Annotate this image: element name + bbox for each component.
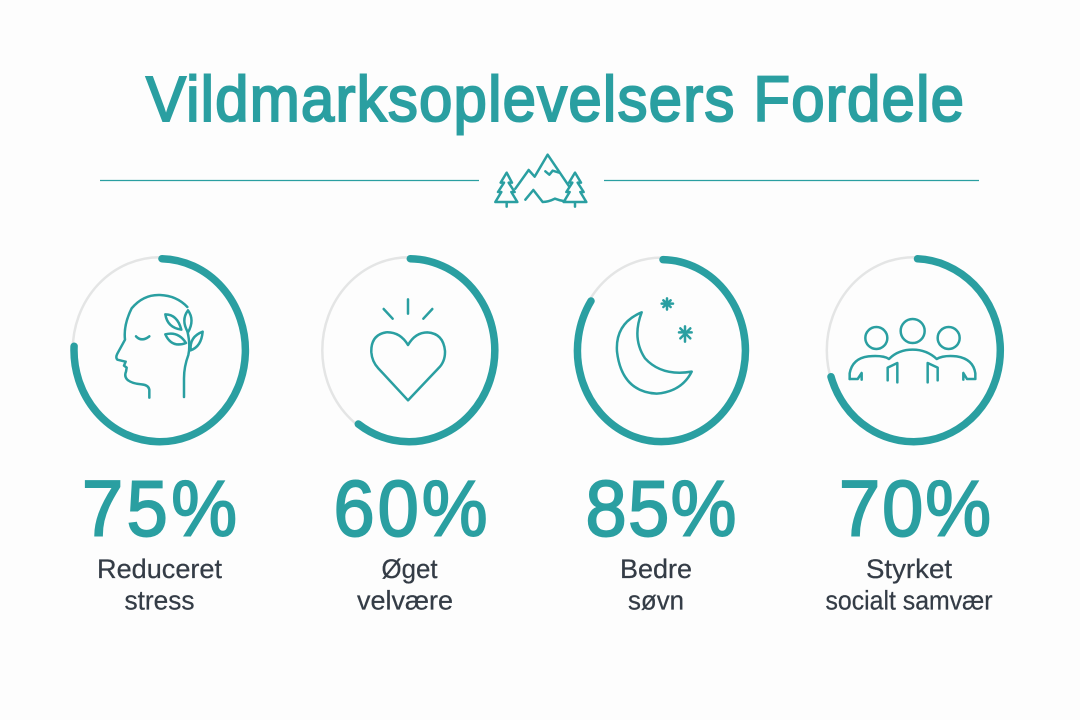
panel: reduceret stress [73,257,247,616]
progress ring 70% [827,257,1001,443]
label: Styrket [866,554,953,584]
title divider with mountain icon [100,155,979,207]
icon: heart with rays [371,299,445,400]
label: Øget [382,554,438,584]
icon: mountains and trees [495,155,586,207]
value: 75% [82,465,237,553]
panel: øget velvære [322,257,495,616]
icon: head with leaves [116,295,203,398]
value: 70% [839,465,991,553]
label: socialt samvær [826,586,993,616]
label: Reduceret [97,554,223,584]
label: stress [124,586,194,616]
icon: group of three people [850,319,975,382]
label: søvn [628,586,684,616]
progress ring 85% [576,258,747,444]
icon: crescent moon and stars [617,298,692,394]
progress ring 75% [73,257,247,443]
label: Bedre [620,554,692,584]
title: Vildmarksoplevelsers Fordele [146,64,964,135]
panel: styrket socialt samvær [826,257,1001,616]
label: velvære [357,586,453,616]
value: 60% [334,465,488,553]
panel: bedre søvn [576,258,747,616]
progress ring 60% [322,257,495,443]
value: 85% [586,465,736,553]
